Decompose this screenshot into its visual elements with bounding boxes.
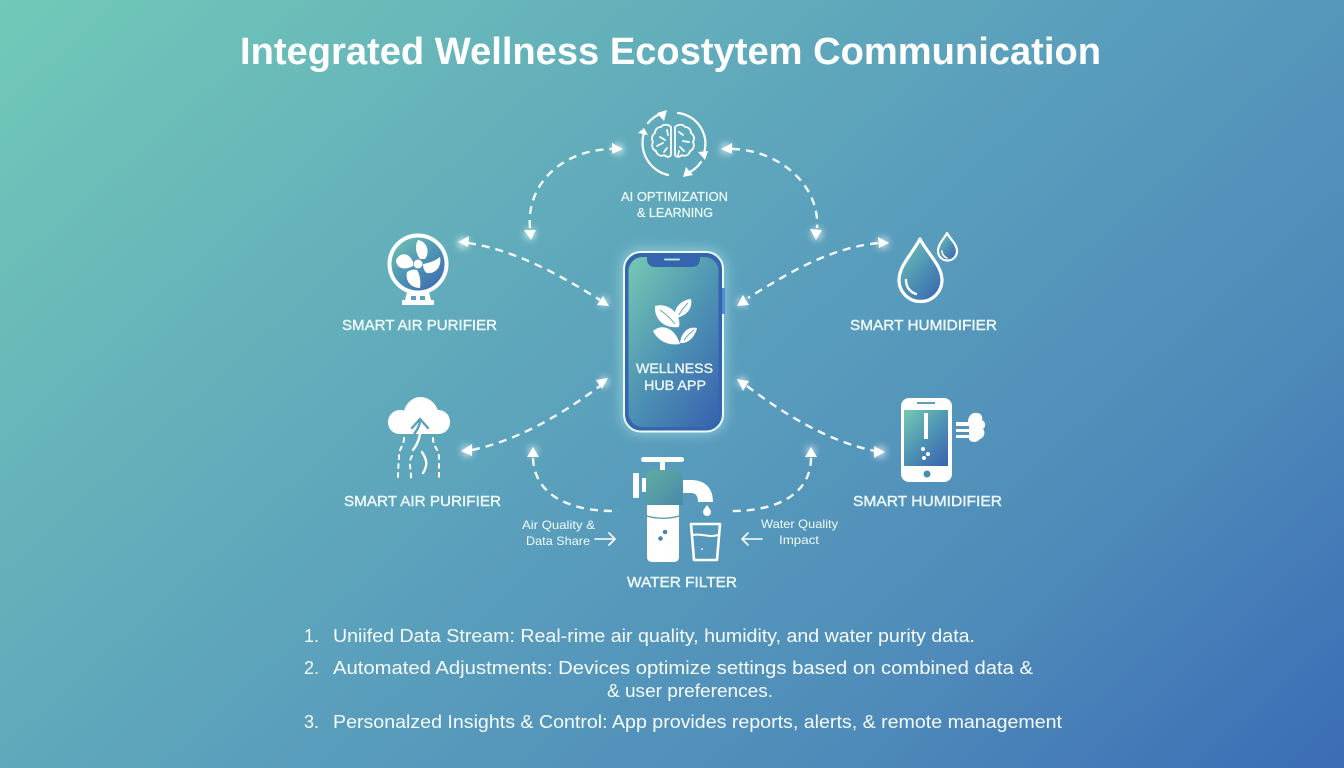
label: smart humidifier bottom: SMART HUMIDIFIER <box>853 493 1002 510</box>
arrow: brain to air purifier side <box>524 143 624 240</box>
icon: leaves <box>653 299 697 344</box>
arrow: second humidifier to app <box>737 377 886 458</box>
arrow: water impact <box>742 533 762 545</box>
arrow: water filter to humidifier <box>728 446 817 511</box>
label: smart air purifier top: SMART AIR PURIFIER <box>342 317 497 334</box>
label: AI optimization <box>621 189 728 220</box>
list item 1: 1. <box>304 626 319 646</box>
list item 1: Uniifed Data Stream: Real-rime air quality, humidity, and water purity data. <box>333 626 975 646</box>
label: water quality impact: Water Quality <box>761 517 838 531</box>
title: Integrated Wellness Ecostytem Communication <box>240 31 1101 73</box>
label: air quality and data share: Data Share <box>526 534 590 548</box>
numbered list <box>304 626 1062 732</box>
list item 2: 2. <box>304 658 319 678</box>
icon: fan air purifier <box>390 236 446 305</box>
label: wellness hub app: WELLNESS <box>636 360 713 376</box>
icon: phone with vapor <box>901 398 985 482</box>
list item 2: Automated Adjustments: Devices optimize settings based on combined data & <box>333 658 1033 678</box>
label: air quality and data share: Air Quality & <box>522 518 595 532</box>
list item 2: & user preferences. <box>607 681 773 701</box>
list item 2 <box>304 658 1033 701</box>
label: wellness hub app: HUB APP <box>644 377 706 393</box>
label: smart humidifier top: SMART HUMIDIFIER <box>850 317 997 334</box>
label: wellness hub app <box>636 360 713 393</box>
list item 3: 3. <box>304 712 319 732</box>
icon: AI brain with cycle arrows <box>638 110 708 177</box>
arrow: air purifier to app <box>457 236 609 307</box>
label: water quality impact <box>761 517 838 547</box>
icon: droplets humidifier <box>899 233 957 302</box>
arrow: brain to humidifier side <box>720 143 823 240</box>
list item 3: Personalzed Insights & Control: App provides reports, alerts, & remote management <box>333 712 1062 732</box>
label: water quality impact: Impact <box>779 533 820 547</box>
phone: wellness hub app <box>621 249 726 434</box>
label: water filter: WATER FILTER <box>627 574 737 591</box>
icon: water filter, tap and glass <box>633 457 720 562</box>
arrow: water filter to air purifier <box>527 446 618 511</box>
arrow: data share <box>595 533 615 545</box>
label: AI optimization: AI OPTIMIZATION <box>621 189 728 204</box>
label: AI optimization: & LEARNING <box>637 205 713 220</box>
arrow: humidifier to app <box>737 237 889 307</box>
arrow: second air purifier to app <box>461 377 609 457</box>
icon: cloud with rising air <box>388 397 450 478</box>
label: smart air purifier bottom: SMART AIR PURIFIER <box>344 493 501 510</box>
label: air quality and data share <box>522 518 595 548</box>
